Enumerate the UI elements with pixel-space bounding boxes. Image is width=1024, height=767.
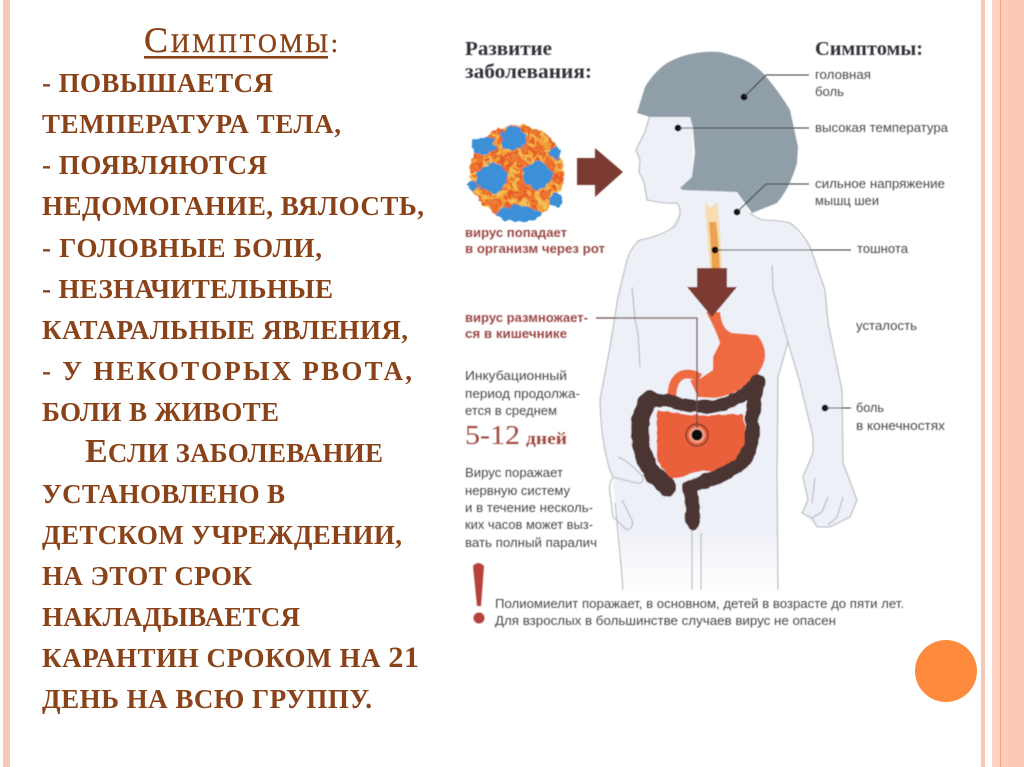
icon: virus [468, 125, 564, 222]
illustration: esophagus [705, 202, 722, 270]
label: fatigue: усталость [856, 319, 917, 333]
symptom list: БОЛИ В ЖИВОТЕ [42, 397, 279, 427]
label: limb pain [822, 401, 946, 433]
arrow: into body [577, 148, 623, 197]
symptom list [42, 68, 424, 427]
panel: disease infographic [465, 38, 948, 628]
symptom list: - У НЕКОТОРЫХ РВОТА, [42, 356, 412, 386]
callout: virus enters [465, 226, 605, 256]
arrow: down to intestine [687, 268, 737, 317]
symptom list: ТЕМПЕРАТУРА ТЕЛА, [42, 109, 341, 139]
right border stripes [981, 0, 1024, 767]
callout: virus enters: в организм через рот [465, 242, 605, 256]
illustration: child body [600, 115, 857, 592]
illustration: hair [637, 52, 798, 213]
illustration: colon [640, 380, 758, 523]
label: nausea: тошнота [857, 242, 908, 256]
heading: disease development: заболевания: [465, 61, 592, 83]
label: headache: головная [815, 68, 871, 82]
text: incubation period: Инкубационный [465, 369, 567, 383]
heading: symptoms list: Симптомы: [815, 38, 923, 60]
text: paralysis warning: и в течение несколь- [465, 501, 593, 515]
quarantine note: УСТАНОВЛЕНО В [42, 479, 285, 509]
label: high temperature [675, 121, 948, 135]
label: high temperature: высокая температура [815, 121, 948, 135]
text: age note: Полиомиелит поражает, в основном, детей в возрасте до пяти лет. [495, 597, 904, 611]
callout: virus multiplies: ся в кишечнике [465, 327, 567, 341]
text: paralysis warning: нервную систему [465, 484, 571, 498]
symptom labels [675, 68, 948, 433]
quarantine note: НА ЭТОТ СРОК [42, 561, 252, 591]
text block: symptoms [42, 20, 424, 714]
heading: disease development [465, 38, 592, 83]
text: age note: Для взрослых в большинстве случаев вирус не опасен [495, 614, 836, 628]
quarantine note: ДЕНЬ НА ВСЮ ГРУППУ. [42, 684, 372, 714]
quarantine note: ДЕТСКОМ УЧРЕЖДЕНИИ, [42, 520, 402, 550]
callout: virus multiplies: вирус размножает- [465, 311, 588, 325]
stat: 5-12 days: 5-12 [465, 420, 520, 450]
callout: virus enters: вирус попадает [465, 226, 567, 240]
symptom list: - НЕЗНАЧИТЕЛЬНЫЕ [42, 274, 333, 304]
label: limb pain: в конечностях [856, 419, 946, 433]
heading: symptoms: СИМПТОМЫ: [144, 20, 338, 60]
illustration: stomach [672, 312, 765, 398]
illustration: virus target [686, 424, 708, 446]
text: incubation period: период продолжа- [465, 387, 580, 401]
text: age note [495, 597, 904, 628]
illustration: small intestine [657, 410, 747, 480]
symptom list: - ГОЛОВНЫЕ БОЛИ, [42, 233, 322, 263]
text: paralysis warning: вать полный паралич [465, 536, 597, 550]
quarantine note [42, 433, 419, 714]
text: paralysis warning: ких часов может выз- [465, 518, 593, 532]
callout: virus multiplies [465, 311, 697, 428]
decorative orange circle [915, 640, 977, 702]
symptom list: - ПОЯВЛЯЮТСЯ [42, 150, 268, 180]
left border stripe [3, 0, 10, 767]
symptom list: НЕДОМОГАНИЕ, ВЯЛОСТЬ, [42, 191, 424, 221]
quarantine note: ЕСЛИ ЗАБОЛЕВАНИЕ [85, 433, 383, 470]
label: neck tension [734, 177, 945, 215]
icon: exclamation mark [473, 563, 484, 624]
text: paralysis warning [465, 466, 597, 550]
stat: 5-12 days: дней [526, 429, 567, 448]
label: neck tension: мышц шеи [815, 194, 879, 208]
label: nausea [712, 242, 908, 256]
stat: 5-12 days [465, 420, 567, 450]
label: headache: боль [815, 85, 844, 99]
quarantine note: КАРАНТИН СРОКОМ НА 21 [42, 641, 419, 674]
text: incubation period: ется в среднем [465, 404, 557, 418]
heading: disease development: Развитие [465, 38, 552, 60]
symptom list: КАТАРАЛЬНЫЕ ЯВЛЕНИЯ, [42, 315, 408, 345]
label: headache [741, 68, 871, 100]
symptom list: - ПОВЫШАЕТСЯ [42, 68, 274, 98]
label: limb pain: боль [856, 401, 884, 415]
label: neck tension: сильное напряжение [815, 177, 945, 191]
text: incubation period [465, 369, 580, 418]
quarantine note: НАКЛАДЫВАЕТСЯ [42, 602, 300, 632]
text: paralysis warning: Вирус поражает [465, 466, 563, 480]
